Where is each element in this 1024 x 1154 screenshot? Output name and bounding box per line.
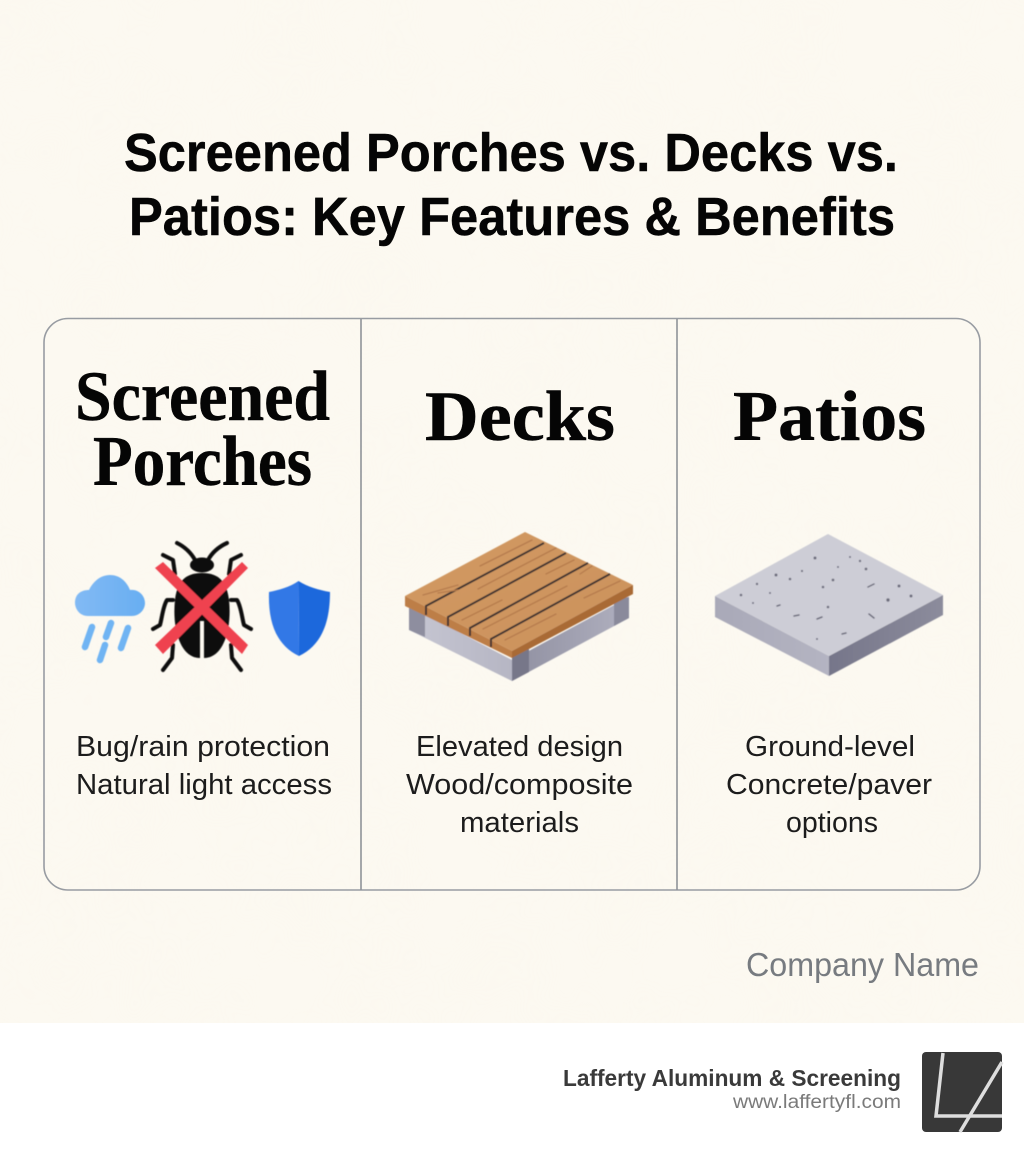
- text: patio features: [726, 731, 932, 839]
- text: deck features: Wood/composite: [406, 769, 633, 801]
- panel: decks: [405, 378, 633, 839]
- icon: rain cloud: [75, 575, 145, 660]
- icon: blue shield: [269, 581, 330, 656]
- heading: screened porches: Screened: [75, 358, 330, 436]
- company name placeholder: Company Name: [746, 946, 979, 983]
- text: patio features: Concrete/paver: [726, 769, 932, 801]
- text: screened porch features: Natural light access: [76, 769, 332, 801]
- panel: comparison table: [44, 318, 980, 890]
- icon: concrete patio slab: [715, 534, 943, 676]
- icon: wooden deck: [405, 532, 633, 681]
- panel: patios: [715, 378, 943, 839]
- text: screened porch features: Bug/rain protection: [76, 731, 330, 763]
- text: deck features: materials: [460, 807, 579, 839]
- footer bar: [0, 1023, 1024, 1154]
- heading: screened porches: Porches: [93, 423, 312, 501]
- title: [124, 123, 898, 247]
- footer website: www.laffertyfl.com: [732, 1092, 901, 1113]
- text: patio features: Ground-level: [745, 731, 915, 763]
- heading: screened porches: [75, 358, 330, 501]
- title: Screened Porches vs. Decks vs.: [124, 123, 898, 183]
- logo: [922, 1052, 1002, 1132]
- heading: patios: Patios: [733, 378, 926, 456]
- text: patio features: options: [786, 807, 878, 839]
- text: screened porch features: [76, 731, 332, 801]
- footer company name: Lafferty Aluminum & Screening: [563, 1065, 901, 1091]
- title: Patios: Key Features & Benefits: [129, 187, 895, 247]
- panel: screened porches: [75, 358, 332, 801]
- heading: decks: Decks: [425, 378, 615, 456]
- text: deck features: [406, 731, 633, 839]
- icon: crossed-out bug: [153, 543, 251, 670]
- text: deck features: Elevated design: [416, 731, 623, 763]
